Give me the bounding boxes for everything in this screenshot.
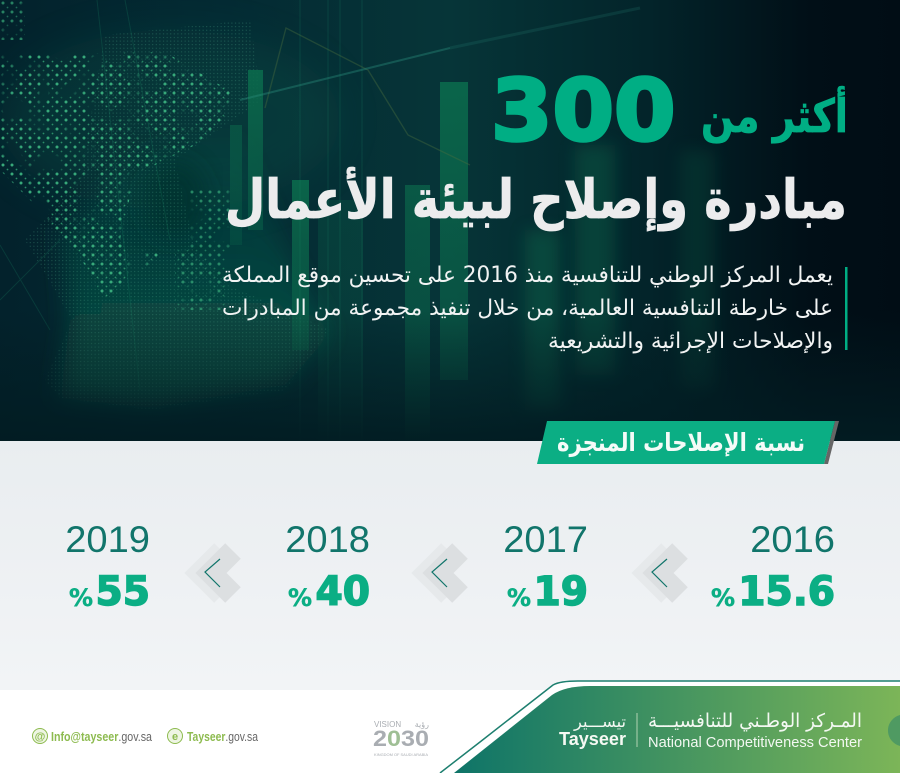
map glow: [0, 30, 340, 408]
stat: 2018: %: [288, 584, 312, 612]
email contact: Info@tayseer.gov.sa: [51, 730, 152, 744]
paragraph accent bar: [845, 267, 848, 350]
words: more than: أكثر من: [701, 86, 848, 143]
stat: 2016: 2016: [750, 519, 835, 560]
stat: 2016: [711, 519, 835, 615]
stat: 2018: 40: [315, 569, 370, 615]
vision 2030 logo: 2030: [373, 726, 429, 751]
center name english: National Competitiveness Center: [648, 734, 862, 751]
stat: 2019: [65, 519, 150, 615]
footer green banner: [440, 681, 900, 773]
website contact: e: [172, 731, 178, 743]
section badge: نسبة الإصلاحات المنجزة: [557, 428, 805, 458]
stat: 2019: 55: [95, 569, 150, 615]
stat: 2016: %: [711, 584, 735, 612]
tayseer logo: تيســـير: [573, 712, 626, 732]
stat: 2017: 2017: [503, 519, 588, 560]
arrow 2: [427, 551, 460, 595]
trend lines: [0, 0, 640, 440]
arrow 1: [647, 551, 680, 595]
footer white strip: [0, 690, 900, 773]
statistics panel background: [0, 441, 900, 691]
stat: 2016: 15.6: [738, 569, 835, 615]
stat: 2018: 2018: [285, 519, 370, 560]
number 300: 300: [491, 63, 675, 161]
description paragraph: يعمل المركز الوطني للتنافسية منذ 2016 على تحسين موقع المملكة: [222, 263, 833, 288]
vision 2030 logo: VISION: [374, 720, 401, 729]
tayseer logo: [559, 712, 626, 749]
description paragraph: على خارطة التنافسية العالمية، من خلال تنفيذ مجموعة من المبادرات: [222, 296, 833, 321]
stat: 2019: 2019: [65, 519, 150, 560]
vision 2030 logo: [373, 720, 429, 757]
dotted world map: [0, 0, 330, 410]
chart bars: [230, 70, 715, 440]
section badge: [537, 421, 839, 464]
stat: 2019: %: [69, 584, 93, 612]
email contact: @: [35, 731, 46, 743]
description paragraph: [222, 263, 833, 354]
arrow 3: [200, 551, 233, 595]
vision 2030 logo: رؤية: [415, 720, 429, 729]
website contact: [168, 728, 258, 744]
stat: 2017: [503, 519, 588, 615]
stat: 2018: [285, 519, 370, 615]
stat: 2017: %: [507, 584, 531, 612]
description paragraph: والإصلاحات الإجرائية والتشريعية: [548, 329, 833, 354]
title: number line: [491, 63, 848, 161]
divider: [636, 713, 638, 747]
tayseer logo: Tayseer: [559, 729, 626, 749]
hero background: [0, 0, 900, 442]
stat: 2017: 19: [533, 569, 588, 615]
center name arabic: المـركز الوطـني للتنافسيـــة: [648, 710, 862, 732]
website contact: Tayseer.gov.sa: [187, 730, 258, 744]
vision 2030 logo: KINGDOM OF SAUDI ARABIA: [374, 752, 428, 757]
